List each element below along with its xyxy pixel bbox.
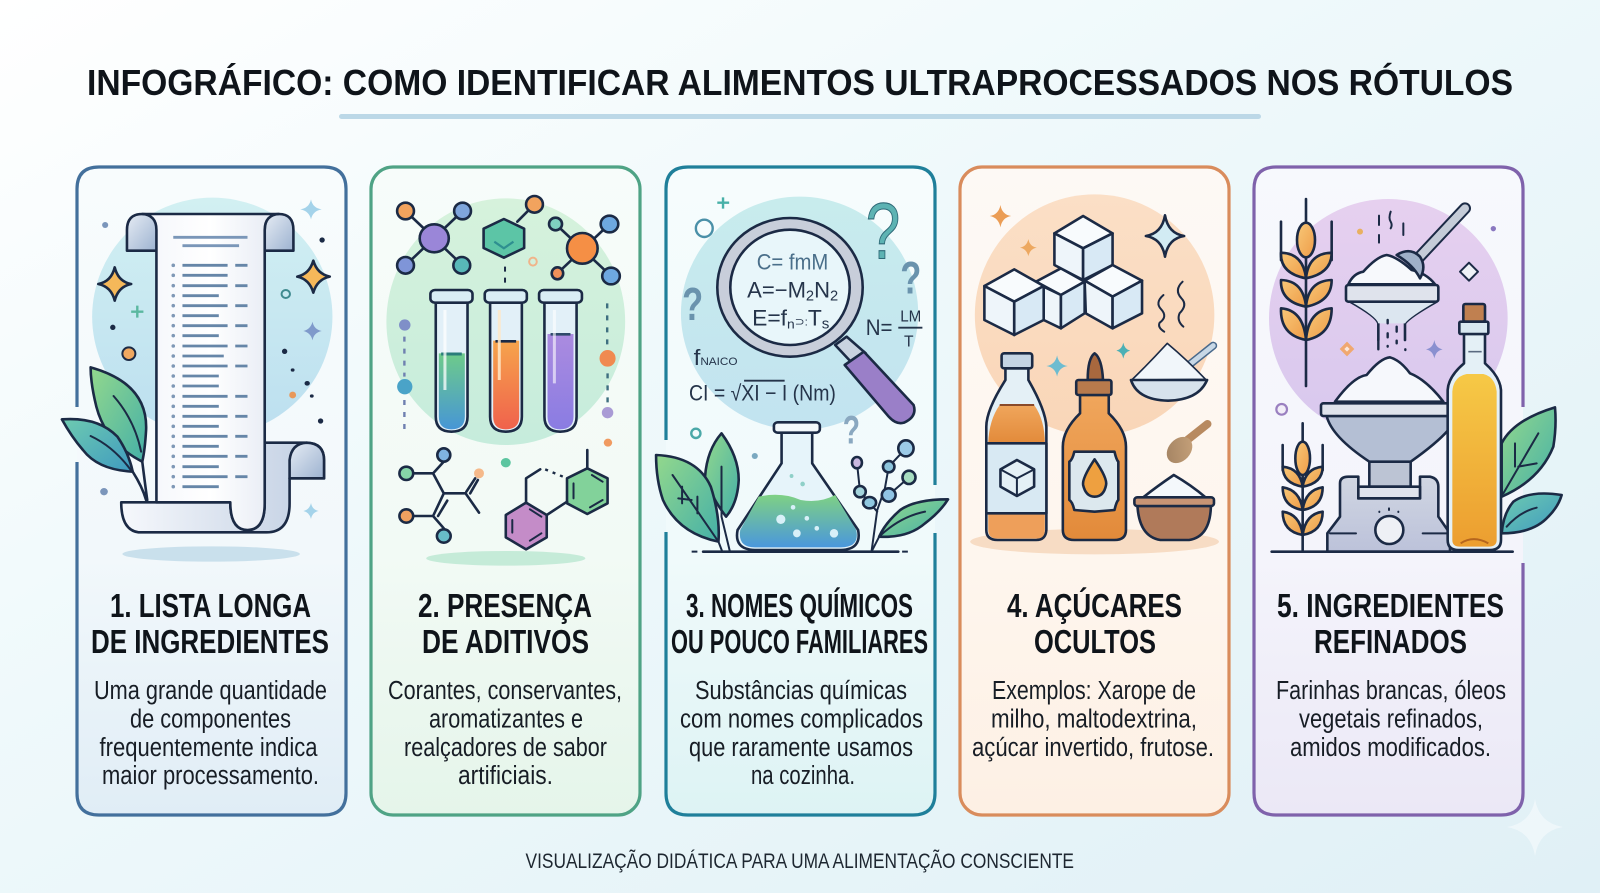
icon: wheat, flour mill and oil bottle <box>1269 199 1562 552</box>
title underline <box>339 114 1261 119</box>
icon: test tubes and molecules <box>386 196 625 566</box>
text: refinados description <box>1276 677 1506 762</box>
icon: magnifier, formulas and flask: 2 <box>806 289 814 304</box>
text: nomes químicos description: na cozinha. <box>751 762 855 790</box>
icon: sugar cubes, bottles and bowls <box>970 194 1219 554</box>
heading: açúcares ocultos: OCULTOS <box>1034 624 1156 661</box>
heading: nomes químicos <box>671 587 928 661</box>
icon: magnifier, formulas and flask: T <box>904 334 914 350</box>
panel: 3 nomes químicos <box>656 167 948 815</box>
text: lista longa description: Uma grande quantidade <box>94 677 327 705</box>
icon: magnifier, formulas and flask: N <box>814 279 830 303</box>
icon: ingredient list scroll <box>62 198 332 562</box>
icon: magnifier, formulas and flask: CI = √XI − I (Nm) <box>689 382 836 406</box>
text: lista longa description: frequentemente indica <box>100 734 318 762</box>
text: lista longa description: maior processamento. <box>102 762 319 790</box>
icon: magnifier, formulas and flask: C= fmM <box>757 251 828 275</box>
icon: magnifier, formulas and flask <box>656 187 948 552</box>
icon: magnifier, formulas and flask: n <box>787 318 795 332</box>
heading: lista longa <box>91 588 329 661</box>
heading: açúcares ocultos: 4. AÇÚCARES <box>1007 587 1182 625</box>
heading: açúcares ocultos <box>1007 587 1182 661</box>
panel: 2 presença de aditivos <box>371 167 640 815</box>
icon: magnifier, formulas and flask: ? <box>682 278 703 330</box>
icon: corner sparkle <box>1507 799 1563 856</box>
heading: presença de aditivos <box>418 588 592 661</box>
icon: magnifier, formulas and flask: 2 <box>830 289 838 304</box>
text: refinados description: vegetais refinados, <box>1299 706 1483 734</box>
icon: magnifier, formulas and flask: ? <box>843 408 860 453</box>
icon: magnifier, formulas and flask: T <box>808 307 823 331</box>
text: nomes químicos description: com nomes complicados <box>680 706 923 734</box>
heading: ingredientes refinados: 5. INGREDIENTES <box>1277 588 1504 625</box>
title: INFOGRÁFICO: COMO IDENTIFICAR ALIMENTOS ULTRAPROCESSADOS NOS RÓTULOS <box>87 61 1513 103</box>
icon: magnifier, formulas and flask: ? <box>900 253 921 304</box>
panel: 1 lista longa de ingredientes <box>62 167 346 815</box>
text: açúcares description: Exemplos: Xarope de <box>992 677 1196 705</box>
text: aditivos description: aromatizantes e <box>429 706 583 734</box>
text: açúcares description: milho, maltodextrina, <box>991 706 1197 734</box>
panel: 4 açúcares ocultos <box>960 167 1229 815</box>
text: lista longa description: de componentes <box>130 706 291 734</box>
text: aditivos description: realçadores de sabor <box>404 734 607 762</box>
text: nomes químicos description: Substâncias químicas <box>695 677 907 705</box>
heading: nomes químicos: OU POUCO FAMILIARES <box>671 624 928 661</box>
icon: magnifier, formulas and flask: ? <box>866 187 900 276</box>
icon: magnifier, formulas and flask: fNAICO <box>694 346 738 371</box>
icon: magnifier, formulas and flask: s <box>822 317 830 332</box>
heading: lista longa: DE INGREDIENTES <box>91 624 329 661</box>
heading: ingredientes refinados <box>1277 588 1504 661</box>
text: aditivos description <box>388 677 622 790</box>
text: refinados description: Farinhas brancas, óleos <box>1276 677 1506 705</box>
icon: magnifier, formulas and flask: E=f <box>752 307 791 331</box>
text: aditivos description: artificiais. <box>458 762 553 790</box>
heading: lista longa: 1. LISTA LONGA <box>110 588 311 625</box>
panel: 5 ingredientes refinados <box>1254 167 1562 815</box>
text: aditivos description: Corantes, conservantes, <box>388 677 622 705</box>
footer caption: VISUALIZAÇÃO DIDÁTICA PARA UMA ALIMENTAÇÃO CONSCIENTE <box>526 848 1074 873</box>
text: nomes químicos description <box>680 677 923 790</box>
heading: presença de aditivos: DE ADITIVOS <box>422 624 589 661</box>
text: açúcares description <box>972 677 1214 762</box>
text: açúcares description: açúcar invertido, frutose. <box>972 734 1214 762</box>
icon: magnifier, formulas and flask: LM <box>900 309 921 325</box>
icon: magnifier, formulas and flask: A=−M <box>747 279 814 303</box>
heading: nomes químicos: 3. NOMES QUÍMICOS <box>686 587 913 625</box>
text: lista longa description <box>94 677 327 790</box>
icon: magnifier, formulas and flask: N= <box>866 316 893 341</box>
text: nomes químicos description: que raramente usamos <box>689 734 913 762</box>
icon: magnifier, formulas and flask: ⊃: <box>795 315 808 328</box>
heading: ingredientes refinados: REFINADOS <box>1314 624 1467 661</box>
text: refinados description: amidos modificados. <box>1290 734 1491 762</box>
heading: presença de aditivos: 2. PRESENÇA <box>418 588 592 625</box>
